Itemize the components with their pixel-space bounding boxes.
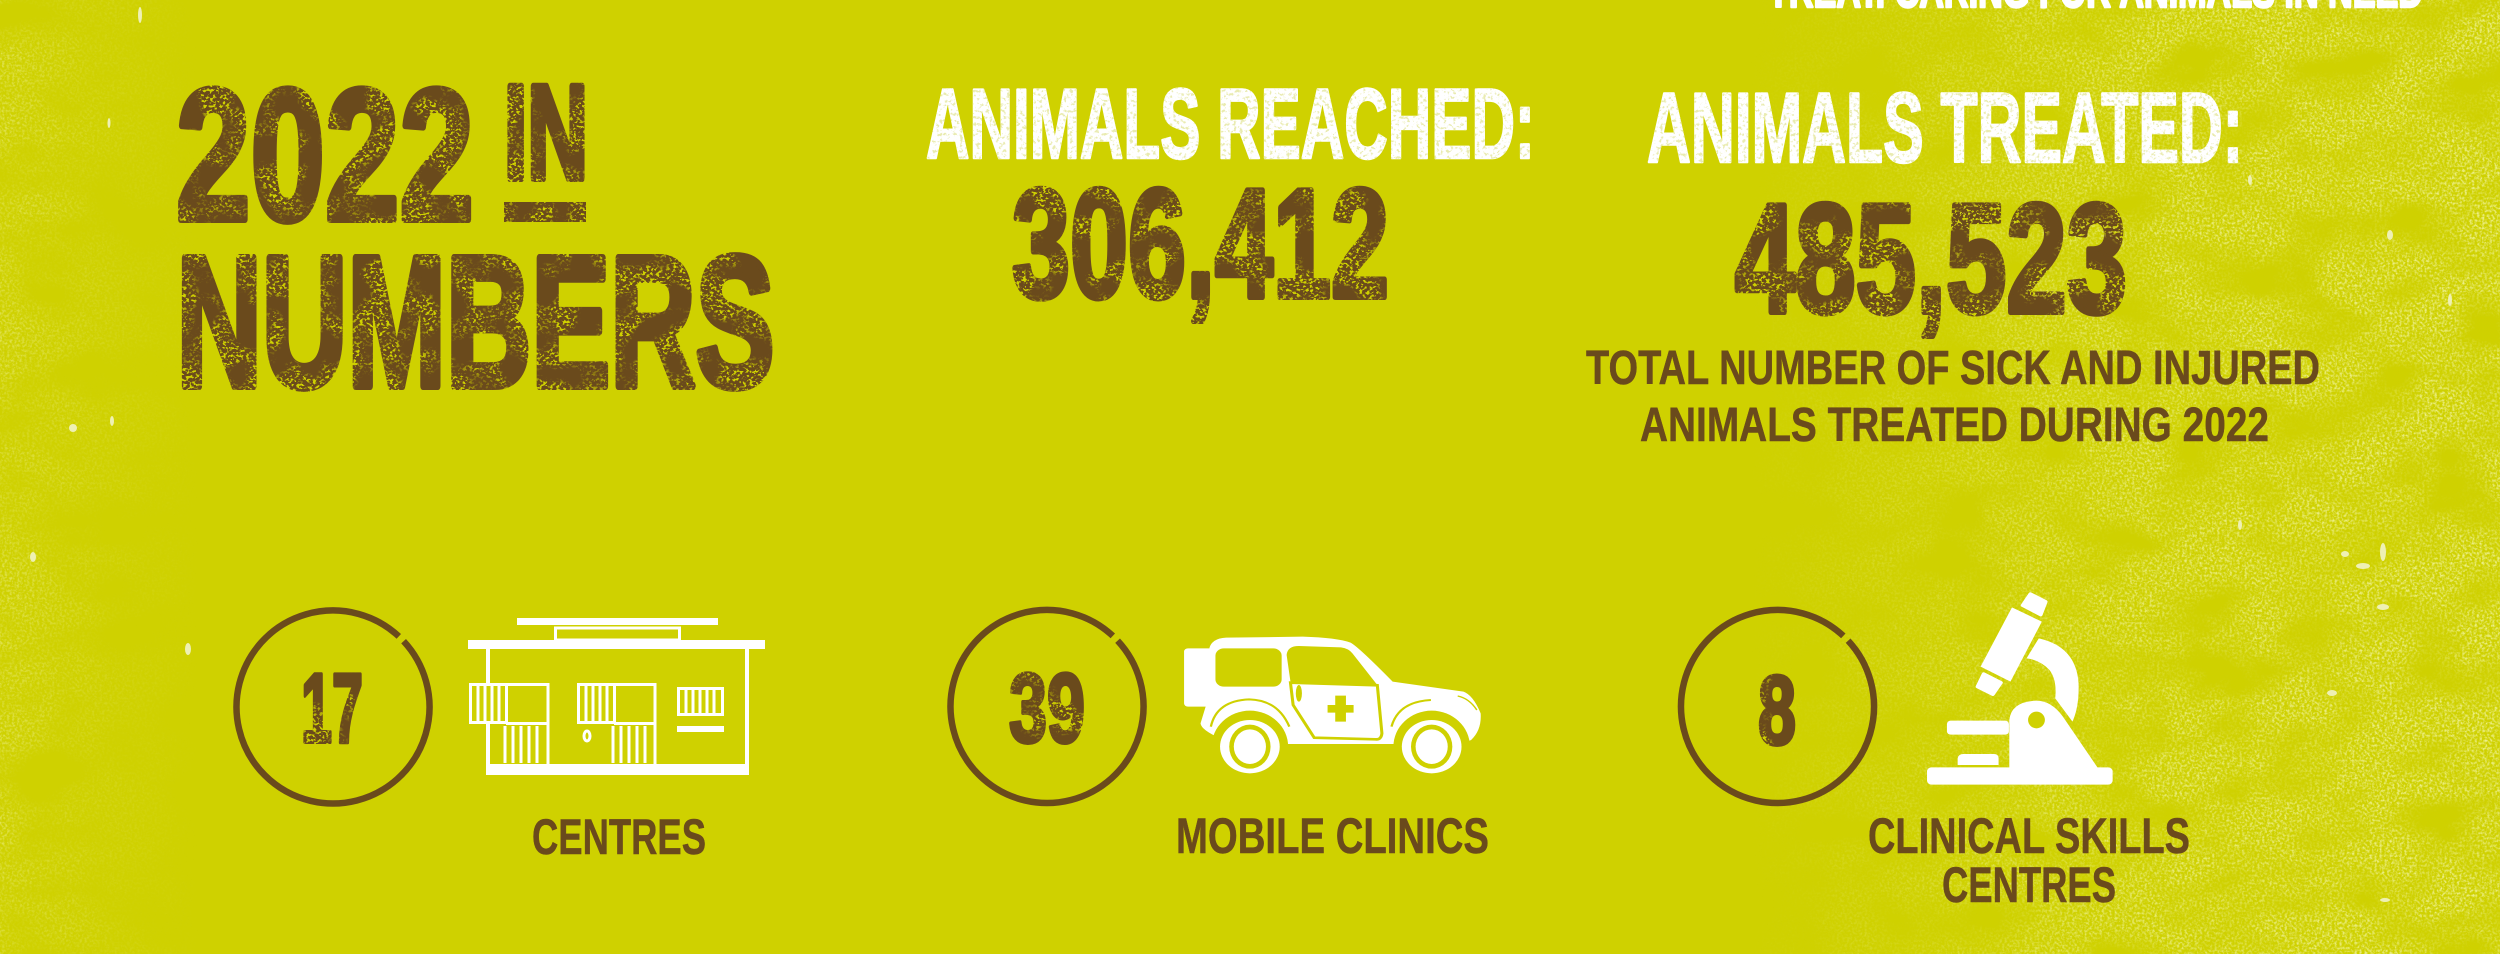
label: centres: CENTRES [532, 809, 706, 865]
number ring: 8 [1681, 610, 1874, 803]
number ring: 39 [951, 610, 1144, 803]
stat: 17 centres [237, 610, 765, 865]
stat: 39 mobile clinics [951, 610, 1489, 864]
label: clinical skills centres: CENTRES [1942, 857, 2116, 913]
heading: animals reached: ANIMALS REACHED: [926, 68, 1535, 179]
description: animals treated [1586, 342, 2320, 452]
number: 485,523: 485,523 [1735, 172, 2127, 345]
title: 2022 in numbers: IN [504, 58, 588, 208]
number: 306,412: 306,412 [1012, 157, 1389, 330]
label: mobile clinics: MOBILE CLINICS [1176, 808, 1489, 864]
number ring: 17 [237, 610, 430, 803]
label: clinical skills centres: CLINICAL SKILLS [1868, 808, 2190, 864]
title: 2022 in numbers: NUMBERS [176, 219, 774, 426]
title: 2022 in numbers: 2022 [176, 50, 474, 260]
title: 2022 in numbers [176, 50, 774, 426]
stat: 8 clinical skills centres [1681, 594, 2190, 913]
number: 8: 8 [1758, 655, 1796, 765]
icon: vehicle [1184, 637, 1481, 783]
label: clinical skills centres [1868, 808, 2190, 913]
description: animals treated: TOTAL NUMBER OF SICK AND INJURED [1586, 342, 2320, 395]
icon: building [468, 618, 765, 775]
description: animals treated: ANIMALS TREATED DURING 2022 [1640, 399, 2269, 452]
number: 39: 39 [1009, 653, 1085, 763]
icon: microscope [1927, 594, 2113, 785]
number: 17: 17 [301, 653, 363, 763]
